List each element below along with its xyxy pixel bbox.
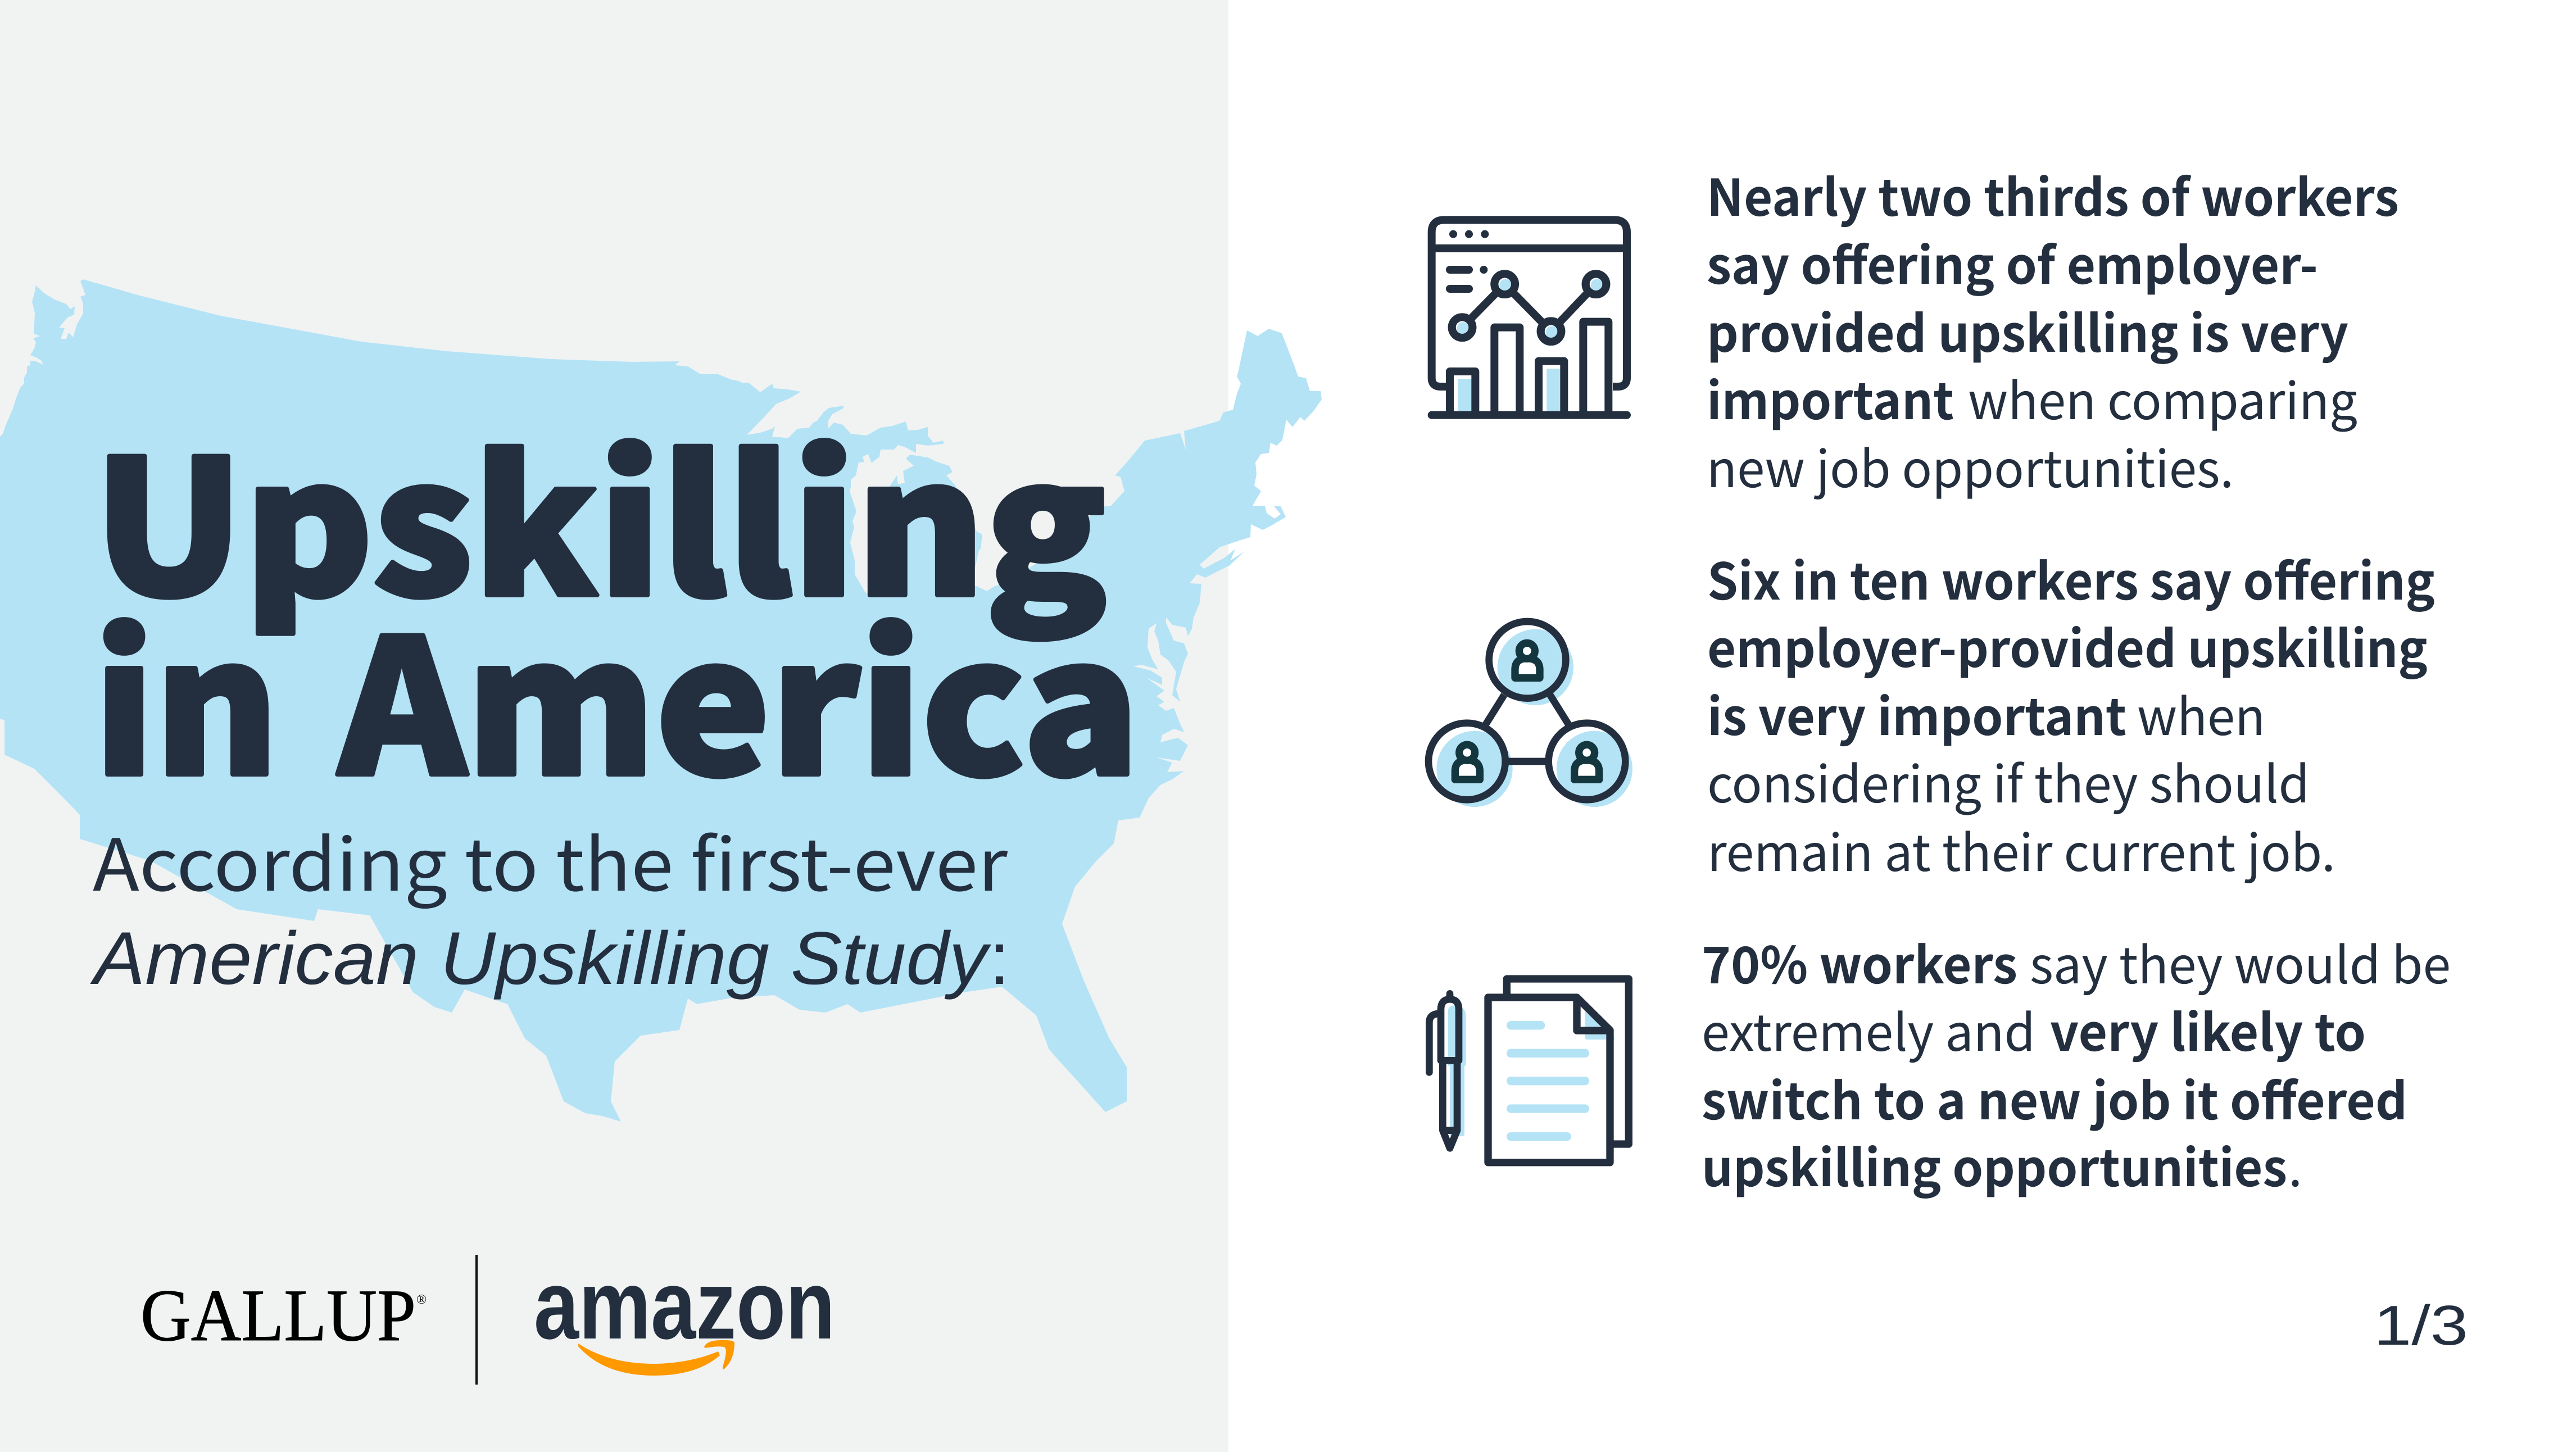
paragraph 2: remain at their current job. (1707, 813, 2335, 886)
icon: connected people network (1428, 621, 1632, 807)
paragraph 1: important (1707, 361, 1954, 434)
subtitle: American Upskilling Study (90, 917, 992, 1000)
paragraph 3 (1702, 925, 2451, 1201)
icon: documents and pen (1429, 979, 1629, 1163)
paragraph 2: when (2137, 677, 2265, 750)
paragraph 3: say they would be (2030, 925, 2451, 998)
logo: Amazon: amazon (534, 1250, 835, 1359)
amazon smile (578, 1340, 734, 1376)
logo: Gallup: GALLUP (140, 1274, 416, 1356)
logo: Gallup: ® (416, 1292, 427, 1307)
paragraph 3: upskilling opportunities (1702, 1128, 2287, 1201)
icon: dashboard chart (1432, 220, 1627, 415)
title (93, 379, 1140, 828)
panel: left grey background (0, 0, 1228, 1452)
paragraph 1: when comparing (1968, 361, 2357, 434)
paragraph 3: very likely to (2050, 992, 2366, 1065)
paragraph 1: new job opportunities. (1707, 429, 2234, 502)
paragraph 1: provided upskilling is very (1707, 293, 2348, 366)
paragraph 1: say offering of employer- (1707, 225, 2318, 298)
paragraph 3: extremely and (1702, 992, 2035, 1065)
paragraph 3: switch to a new job it offered (1702, 1061, 2407, 1134)
subtitle: According to the first-ever (93, 807, 1008, 911)
title: in (94, 558, 279, 828)
paragraph 3: 70% workers (1702, 925, 2017, 998)
paragraph 1 (1707, 157, 2399, 502)
map of the United States (0, 279, 1322, 1122)
paragraph 3: . (2288, 1128, 2302, 1201)
title: America (336, 558, 1140, 828)
paragraph 2 (1707, 541, 2435, 886)
paragraph 2: considering if they should (1707, 744, 2310, 817)
paragraph 2: Six in ten workers say offering (1707, 541, 2435, 614)
paragraph 2: is very important (1707, 677, 2126, 750)
paragraph 2: employer-provided upskilling (1707, 609, 2428, 682)
page number: 1/3 (2374, 1294, 2468, 1357)
paragraph 1: Nearly two thirds of workers (1707, 157, 2399, 230)
subtitle (90, 807, 1010, 1000)
subtitle: : (989, 917, 1010, 1000)
logo divider (475, 1255, 478, 1385)
title: Upskilling (93, 379, 1107, 649)
